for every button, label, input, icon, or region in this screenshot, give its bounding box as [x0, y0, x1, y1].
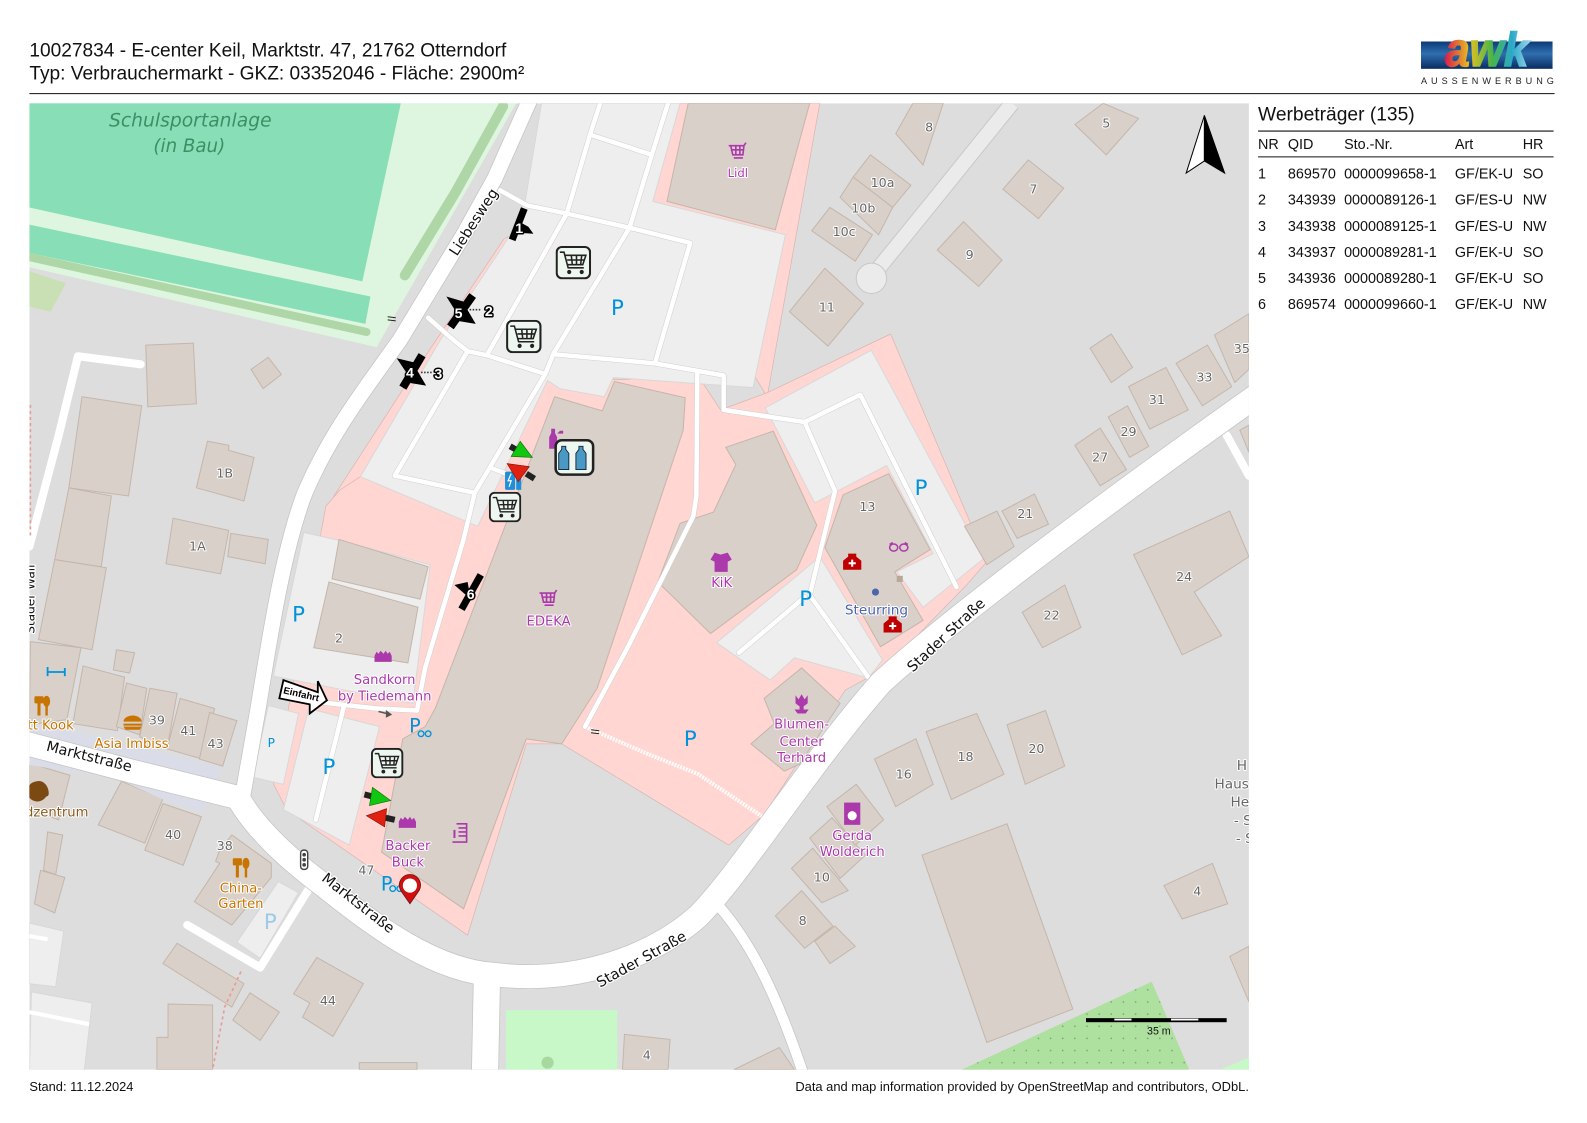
table column headers: Sto.-Nr. — [1344, 137, 1393, 153]
house numbers: 1A — [189, 539, 206, 554]
house numbers: 5 — [1102, 116, 1110, 131]
table row 4: 0000089281-1 — [1344, 245, 1437, 261]
icon: bicycle parking 2 — [382, 876, 402, 892]
table row 4: 4 — [1258, 245, 1266, 261]
road labels: Stader Straße — [594, 929, 689, 991]
house numbers: - S — [1236, 831, 1254, 847]
marker 5 and 2: advertising sites — [446, 296, 493, 327]
exit marker: red arrow bottom — [366, 809, 395, 827]
table row 2 — [1258, 193, 1547, 209]
table row 4: GF/EK-U — [1455, 245, 1513, 261]
house numbers: 9 — [966, 247, 974, 262]
house numbers: 11 — [819, 300, 835, 315]
icon: bed — [48, 667, 65, 676]
barrier marks — [388, 317, 599, 734]
house numbers: 43 — [208, 736, 224, 751]
icon: bicycle parking 2: P — [381, 873, 392, 896]
sports ground: Schulsportanlage: Schulsportanlage — [109, 111, 272, 132]
table row 1: 869570 — [1288, 167, 1336, 183]
sports ground: Schulsportanlage — [29, 103, 516, 347]
table row 4: 343937 — [1288, 245, 1336, 261]
POI labels: dzentrum — [25, 806, 88, 821]
icon: shopping cart 4 — [372, 749, 402, 777]
house numbers: - S — [1234, 813, 1252, 829]
parking P labels: P — [915, 476, 928, 501]
POI labels: Center — [779, 735, 824, 750]
parking P labels: P — [611, 296, 624, 321]
table row 5: 0000089280-1 — [1344, 271, 1437, 287]
icon: burger — [124, 716, 142, 730]
parking P labels — [264, 296, 928, 935]
icon: medical crosses — [849, 560, 896, 630]
house numbers: 13 — [859, 499, 875, 514]
parking P labels: P — [268, 736, 275, 750]
house numbers: 33 — [1196, 370, 1212, 385]
table column headers — [1258, 137, 1543, 153]
header: location title: 10027834 - E-center Keil, Marktstr. 47, 21762 Otterndorf — [29, 41, 507, 62]
scale bar: 35 m — [1147, 1025, 1171, 1037]
green spaces — [506, 982, 1249, 1070]
lavender pedestrian strips — [29, 724, 222, 813]
table column headers: Art — [1455, 137, 1473, 153]
arrow: Einfahrt — [279, 680, 327, 714]
table row 2: 2 — [1258, 193, 1266, 209]
house numbers: 1B — [216, 466, 233, 481]
table row 1: SO — [1523, 167, 1543, 183]
icon: Lidl cart — [729, 143, 746, 158]
table row 2: 343939 — [1288, 193, 1336, 209]
table row 6: NW — [1523, 297, 1547, 313]
house numbers: 10 — [814, 870, 830, 885]
parking P labels: P — [292, 602, 305, 627]
icon: charging station — [505, 472, 521, 490]
icon: palette — [27, 781, 49, 802]
marker 4 and 3: advertising sites: 3 — [434, 367, 442, 383]
POI labels: Sandkorn — [354, 673, 415, 688]
house numbers: 40 — [165, 827, 181, 842]
sports ground: Schulsportanlage: (in Bau) — [153, 136, 225, 157]
table row 6 — [1258, 297, 1547, 313]
table row 6: 0000099660-1 — [1344, 297, 1437, 313]
table row 3: 343938 — [1288, 219, 1336, 235]
arrow: Einfahrt: Einfahrt — [282, 685, 321, 705]
service road with turning circle — [856, 103, 1012, 294]
marker 5 and 2: advertising sites: 5 — [455, 306, 463, 322]
icon: shopping cart 1 — [557, 247, 590, 278]
table row 3: 3 — [1258, 219, 1266, 235]
parking P labels: P — [264, 910, 277, 935]
icon: hairdresser — [452, 824, 467, 842]
road labels: Marktstraße — [45, 739, 133, 776]
house numbers: 10c — [833, 224, 856, 239]
house numbers: Haus — [1215, 776, 1249, 792]
marker 6: advertising site: 6 — [467, 587, 475, 603]
POI labels: Gerda — [832, 829, 872, 844]
table row 4 — [1258, 245, 1543, 261]
parking P labels: P — [799, 587, 812, 612]
house numbers: 41 — [180, 723, 196, 738]
icon: EDEKA cart — [539, 590, 557, 605]
entrance marker: green arrow bottom — [364, 787, 391, 806]
POI labels: Terhard — [776, 751, 826, 766]
house numbers: 2 — [335, 631, 343, 646]
table row 1 — [1258, 167, 1543, 183]
POI labels: China- — [220, 882, 262, 897]
retail area: pink landuse — [273, 103, 987, 935]
house numbers: 7 — [1029, 181, 1037, 196]
footer: data attribution: Data and map information provided by OpenStreetMap and contributors, ODbL. — [795, 1079, 1249, 1094]
POI labels: Buck — [392, 855, 424, 870]
icon: water bottles — [556, 440, 593, 475]
icon: laundry drum — [848, 811, 857, 820]
marker 1: advertising site: 1 — [515, 221, 523, 237]
house numbers: 22 — [1044, 607, 1060, 622]
house numbers: 31 — [1149, 392, 1165, 407]
icon: restaurant China-Garten — [233, 858, 250, 877]
icon: traffic light — [301, 850, 308, 869]
POI labels: tt Kook — [28, 719, 74, 734]
house numbers: 35 — [1234, 341, 1250, 356]
house numbers: 18 — [958, 749, 974, 764]
house numbers: 38 — [217, 838, 233, 853]
road labels: Liebesweg — [447, 186, 502, 259]
table row 3: NW — [1523, 219, 1547, 235]
table column headers: NR — [1258, 137, 1279, 153]
marker 1: advertising site — [512, 208, 533, 240]
POI labels: Steurring — [845, 602, 908, 618]
house numbers: 10b — [851, 201, 875, 216]
marker 6: advertising site — [454, 575, 481, 609]
parking P labels: P — [323, 755, 336, 780]
house numbers: H — [1237, 758, 1247, 774]
buildings — [29, 103, 1249, 1070]
table row 6: 869574 — [1288, 297, 1336, 313]
POI labels: Asia Imbiss — [95, 737, 169, 752]
icon: hairdresser rings — [453, 830, 455, 838]
house numbers: 10a — [871, 175, 894, 190]
POI labels: KiK — [711, 576, 732, 591]
POI labels: Backer — [385, 839, 431, 854]
icon: shopping cart 2 — [507, 321, 540, 352]
icon: glasses — [890, 542, 908, 551]
icon: perfume bottle — [550, 429, 563, 448]
house numbers: 8 — [925, 120, 933, 135]
table row 5: 5 — [1258, 271, 1266, 287]
arrow: small direction — [379, 711, 391, 717]
house numbers: 47 — [358, 862, 374, 877]
location pin — [399, 875, 421, 904]
table row 2: 0000089126-1 — [1344, 193, 1437, 209]
house numbers: 44 — [320, 993, 336, 1008]
road labels: Stader Wall — [23, 565, 37, 634]
table column headers: HR — [1523, 137, 1543, 153]
table row 3 — [1258, 219, 1547, 235]
table row 2: GF/ES-U — [1455, 193, 1513, 209]
road labels: Stader Straße — [905, 596, 989, 676]
house numbers: He — [1230, 795, 1249, 811]
table row 5 — [1258, 271, 1543, 287]
icon: bicycle parking: P — [409, 715, 421, 738]
header: location title: Typ: Verbrauchermarkt - GKZ: 03352046 - Fläche: 2900m² — [29, 63, 524, 84]
table row 3: GF/ES-U — [1455, 219, 1513, 235]
POI labels: Garten — [218, 897, 264, 912]
marker 4 and 3: advertising sites: 4 — [406, 366, 414, 382]
parking areas — [29, 103, 984, 1073]
logo: AWK Aussenwerbung: awk — [1445, 24, 1531, 77]
icon: medical left — [843, 554, 861, 570]
house numbers: 29 — [1120, 424, 1137, 439]
icon: small marker — [897, 576, 903, 582]
exit marker: red arrow top — [507, 464, 534, 482]
icon: flower — [795, 694, 809, 714]
footpaths — [29, 103, 1249, 1070]
table column headers: QID — [1288, 137, 1313, 153]
POI labels: EDEKA — [527, 614, 571, 629]
house numbers: 21 — [1017, 506, 1033, 521]
icon: medical right — [884, 616, 902, 633]
table row 2: NW — [1523, 193, 1547, 209]
table row 6: GF/EK-U — [1455, 297, 1513, 313]
POI labels: Wolderich — [820, 845, 885, 860]
house numbers: 27 — [1092, 450, 1108, 465]
table row 5: GF/EK-U — [1455, 271, 1513, 287]
entrance marker: green arrow top — [510, 441, 532, 457]
table row 5: SO — [1523, 271, 1543, 287]
table heading: Werbeträger (135) — [1258, 104, 1415, 125]
house numbers: 8 — [799, 913, 807, 928]
table row 3: 0000089125-1 — [1344, 219, 1437, 235]
POI labels — [25, 166, 908, 912]
marker 4 and 3: advertising sites — [397, 355, 442, 388]
table: advertising sites — [1258, 104, 1554, 313]
roads — [20, 96, 1255, 1083]
icon: bakery — [375, 651, 416, 828]
house numbers: 24 — [1176, 569, 1192, 584]
table row 6: 6 — [1258, 297, 1266, 313]
POI labels: Blumen- — [774, 718, 829, 733]
table row 4: SO — [1523, 245, 1543, 261]
panel: map — [20, 96, 1255, 1083]
logo: AWK Aussenwerbung: AUSSENWERBUNG — [1421, 76, 1558, 86]
icon: shopping cart 3 — [490, 493, 520, 521]
house numbers: 4 — [1193, 884, 1201, 899]
icon: bicycle parking — [411, 718, 432, 738]
header: location title — [29, 41, 524, 84]
road labels — [23, 186, 989, 991]
table row 1: 0000099658-1 — [1344, 167, 1437, 183]
logo: AWK Aussenwerbung — [1421, 30, 1554, 84]
POI labels: by Tiedemann — [338, 689, 431, 704]
footer: date stamp: Stand: 11.12.2024 — [29, 1079, 133, 1094]
house numbers: 16 — [896, 766, 912, 781]
house numbers — [149, 116, 1254, 1063]
marker 5 and 2: advertising sites: 2 — [485, 304, 493, 320]
house numbers: 39 — [149, 713, 165, 728]
table row 1: GF/EK-U — [1455, 167, 1513, 183]
house numbers: 20 — [1028, 741, 1044, 756]
POI labels: Lidl — [728, 166, 748, 180]
icon: restaurant left — [34, 696, 50, 716]
north arrow — [1186, 115, 1225, 173]
icon: tax adviser dot — [872, 589, 879, 596]
table row 5: 343936 — [1288, 271, 1336, 287]
parking P labels: P — [684, 727, 697, 752]
scale bar — [1086, 1018, 1227, 1037]
house numbers: 4 — [643, 1048, 651, 1063]
icon: laundry — [844, 803, 860, 825]
road labels: Marktstraße — [318, 870, 397, 937]
icon: t-shirt — [711, 553, 732, 572]
POI icons — [27, 143, 908, 896]
table row 1: 1 — [1258, 167, 1266, 183]
